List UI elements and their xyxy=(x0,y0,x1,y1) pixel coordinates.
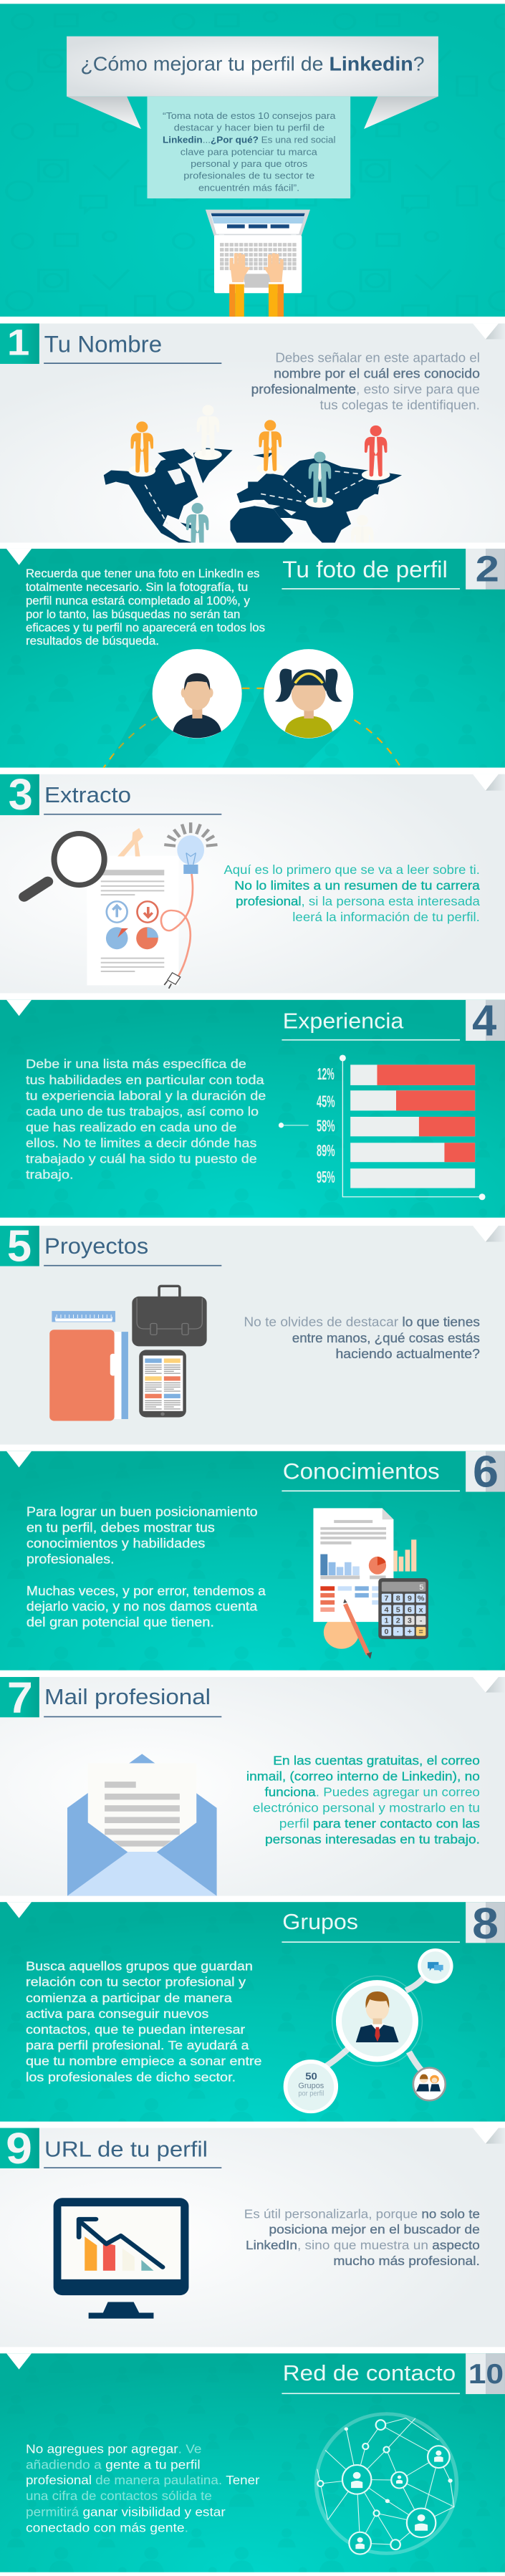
text block: profesional de manera paulatina. Tener xyxy=(26,2473,259,2487)
text block: posiciona mejor en el buscador de xyxy=(269,2222,480,2236)
text block: personas interesadas en tu trabajo. xyxy=(265,1832,480,1847)
number badge 3 xyxy=(0,770,39,819)
panel: 4 Experiencia xyxy=(0,996,505,1218)
panel: 2 Tu foto de perfil xyxy=(0,549,505,768)
icon: calculator: 2 xyxy=(396,1618,400,1625)
text block: profesionales. xyxy=(27,1552,115,1567)
avatar shadows xyxy=(106,681,342,768)
panel: 5 Proyectos xyxy=(0,1221,505,1445)
text block: funciona. Puedes agregar un correo xyxy=(265,1785,480,1799)
text block: No lo limites a un resumen de tu carrera xyxy=(234,879,480,893)
text block: trabajo. xyxy=(26,1168,74,1182)
text block: Recuerda que tener una foto en LinkedIn es xyxy=(26,567,260,580)
number badge 6 xyxy=(466,1446,505,1496)
number badge 5: 5 xyxy=(7,1221,32,1271)
icon: calculator: 1 xyxy=(385,1618,389,1625)
label: groups count: por perfil xyxy=(298,2090,324,2098)
text block: LinkedIn, sino que muestra un aspecto xyxy=(246,2238,480,2252)
icon: calculator: 5 xyxy=(396,1607,400,1614)
text block: No agregues por agregar. Ve xyxy=(26,2441,201,2456)
text block: comienza a participar de manera xyxy=(26,1991,232,2006)
icon: briefcase xyxy=(132,1286,207,1346)
text block: nombre por el cuál eres conocido xyxy=(274,367,480,381)
text block: en tu perfil, debes mostrar tus xyxy=(27,1521,215,1535)
icon: calculator: 7 xyxy=(385,1595,389,1603)
quote box: clave para potenciar tu marca xyxy=(181,147,317,158)
icon: calculator: 3 xyxy=(408,1618,412,1625)
text block: los profesionales de dicho sector. xyxy=(26,2070,236,2085)
icon: calculator: · xyxy=(397,1628,400,1636)
corner notch xyxy=(473,1226,505,1242)
number badge 1: 1 xyxy=(7,322,29,363)
icon: laptop with hands xyxy=(206,210,310,317)
avatar: woman xyxy=(264,649,353,739)
heading: Mail profesional xyxy=(44,1683,211,1709)
text block: tu experiencia laboral y la duración de xyxy=(26,1089,266,1103)
dashed connectors xyxy=(104,688,401,768)
text block: trabajado y cuál ha sido tu puesto de xyxy=(26,1152,257,1166)
bar chart: 95% xyxy=(317,1168,335,1186)
text block: por lo tanto, las búsquedas no serán tan xyxy=(26,607,240,621)
number badge 1 xyxy=(0,322,39,364)
text block xyxy=(26,567,265,648)
text block: Debes señalar en este apartado el xyxy=(275,351,480,365)
quote box: encuentrén más fácil”. xyxy=(198,183,299,193)
text block: haciendo actualmente? xyxy=(335,1347,480,1362)
heading: Red de contacto xyxy=(283,2361,456,2385)
icon: calculator: 6 xyxy=(408,1607,412,1614)
bar chart: 12% xyxy=(317,1065,335,1083)
icon: calculator: - xyxy=(420,1618,423,1625)
icon: calculator: % xyxy=(418,1595,424,1603)
text block xyxy=(223,863,480,925)
panel: 1 Tu Nombre xyxy=(0,322,505,566)
number badge 9: 9 xyxy=(6,2124,32,2173)
text block: del gran potencial que tienen. xyxy=(27,1615,214,1630)
text block xyxy=(251,351,480,413)
text block: profesionalmente, esto sirve para que xyxy=(251,383,480,397)
number badge 9 xyxy=(0,2124,39,2173)
corner notch xyxy=(473,1677,505,1693)
number badge 3: 3 xyxy=(9,770,33,819)
quote box: Linkedin...¿Por qué? Es una red social xyxy=(163,135,335,145)
number badge 8 xyxy=(466,1899,505,1948)
icon: calculator: 4 xyxy=(385,1607,389,1614)
icon: calculator: 0 xyxy=(385,1628,389,1636)
corner notch xyxy=(6,1000,32,1016)
text block: perfil nunca estará completado al 100%, y xyxy=(26,593,250,607)
bar chart: 45% xyxy=(317,1093,335,1111)
quote box xyxy=(147,97,350,198)
text block: En las cuentas gratuitas, el correo xyxy=(273,1754,480,1768)
text block: relación con tu sector profesional y xyxy=(26,1975,246,1989)
icon: envelope xyxy=(67,1754,217,1896)
quote box: personal y para que otros xyxy=(191,159,307,169)
text block: conectado con más gente. xyxy=(26,2520,188,2534)
panel: 7 Mail profesional xyxy=(0,1673,505,1896)
title ribbon xyxy=(67,37,438,97)
text block: conocimientos y habilidades xyxy=(27,1537,205,1551)
corner notch xyxy=(6,2353,32,2370)
text block: Busca aquellos grupos que guardan xyxy=(26,1959,253,1974)
network globe xyxy=(317,2414,457,2555)
heading: Extracto xyxy=(44,782,131,807)
label: groups count: 50 xyxy=(305,2072,317,2082)
heading: Tu Nombre xyxy=(44,332,162,357)
icon: calculator xyxy=(378,1578,428,1639)
icon: compass xyxy=(117,828,143,856)
ribbon tail right xyxy=(364,97,438,129)
text block: Debe ir una lista más específica de xyxy=(26,1057,246,1072)
number badge 6: 6 xyxy=(473,1446,499,1496)
icon: calculator: + xyxy=(408,1628,412,1636)
number badge 2 xyxy=(466,549,505,590)
icon: monitor with chart xyxy=(54,2198,188,2319)
text block: tus habilidades en particular con toda xyxy=(26,1073,264,1087)
icon: calculator: 8 xyxy=(396,1595,400,1603)
number badge 10: 10 xyxy=(468,2358,504,2390)
text block: permitirá ganar visibilidad y estar xyxy=(26,2504,226,2519)
text block: activa para conseguir nuevos xyxy=(26,2007,208,2022)
text block: inmail, (correo interno de Linkedin), no xyxy=(246,1769,480,1784)
icon: light bulb with cable xyxy=(161,822,217,989)
icon: calculator: = xyxy=(418,1628,423,1636)
text block: que has realizado en cada uno de xyxy=(26,1120,236,1135)
number badge 5 xyxy=(0,1221,39,1271)
text block: perfil para tener contacto con las xyxy=(279,1817,480,1831)
panel: header xyxy=(0,4,505,317)
panel: 9 URL de tu perfil xyxy=(0,2124,505,2347)
quote box: “Toma nota de estos 10 consejos para xyxy=(163,111,336,121)
text block: No te olvides de destacar lo que tienes xyxy=(244,1315,480,1330)
text block: Es útil personalizarla, porque no solo te xyxy=(244,2206,480,2221)
label: groups count xyxy=(298,2072,324,2098)
text block: tus colegas te identifiquen. xyxy=(319,398,480,413)
ribbon tail left xyxy=(67,97,141,129)
icon: two people xyxy=(416,2074,441,2092)
corner notch xyxy=(473,324,505,339)
bar chart: 89% xyxy=(317,1142,335,1160)
text block: leerá la información de tu perfil. xyxy=(292,910,480,925)
text block: que tu nombre empiece a sonar entre xyxy=(26,2054,262,2069)
world map xyxy=(104,448,402,543)
number badge 7: 7 xyxy=(7,1673,33,1723)
text block: para perfil profesional. Te ayudará a xyxy=(26,2039,249,2053)
number badge 8: 8 xyxy=(472,1899,499,1948)
avatar: man xyxy=(153,649,242,739)
text block: contactos, que te puedan interesar xyxy=(26,2023,245,2037)
text block: profesional, si la persona esta interesada xyxy=(236,895,480,909)
number badge 2: 2 xyxy=(476,549,499,590)
text block: mucho más profesional. xyxy=(333,2254,480,2268)
text block: dejarlo vacio, y no nos damos cuenta xyxy=(27,1600,258,1615)
heading: Proyectos xyxy=(44,1233,148,1259)
label: groups count: Grupos xyxy=(298,2081,324,2090)
text block xyxy=(26,1959,262,2085)
text block xyxy=(26,2441,259,2534)
number badge 4: 4 xyxy=(472,996,496,1045)
heading: Tu foto de perfil xyxy=(282,557,448,583)
icon: ruler xyxy=(52,1311,115,1322)
icon: magnifier xyxy=(24,834,105,897)
bar chart xyxy=(279,1054,486,1200)
panel: 8 Grupos xyxy=(0,1899,505,2128)
text block: ellos. No te limites a decir dónde has xyxy=(26,1136,256,1150)
icon: tablet xyxy=(139,1350,186,1417)
quote box: destacar y hacer bien tu perfil de xyxy=(174,123,324,133)
text block: cada uno de tus trabajos, así como lo xyxy=(26,1105,259,1119)
text block xyxy=(244,2206,480,2268)
text block: una cifra de contactos sólida te xyxy=(26,2489,212,2503)
icon: report with charts xyxy=(313,1508,416,1649)
corner notch xyxy=(473,774,505,791)
heading: Conocimientos xyxy=(283,1458,440,1484)
panel: 6 Conocimientos xyxy=(0,1446,505,1671)
heading: URL de tu perfil xyxy=(44,2137,208,2161)
number badge 10 xyxy=(466,2353,505,2394)
text block: totalmente necesario. Sin la fotografía, tu xyxy=(26,580,248,594)
heading: Experiencia xyxy=(283,1008,404,1033)
icon: document with charts xyxy=(87,856,179,985)
network diagram xyxy=(284,1948,453,2113)
text block: Aquí es lo primero que se va a leer sobre ti. xyxy=(223,863,480,878)
icon: businessman xyxy=(356,1991,399,2042)
text block: Muchas veces, y por error, tendemos a xyxy=(27,1584,266,1599)
text block xyxy=(26,1057,266,1182)
text block: eficaces y tu perfil no aparecerá en todos los xyxy=(26,620,265,635)
text block: electrónico personal y mostrarlo en tu xyxy=(253,1801,480,1815)
icon: calculator: 5 xyxy=(419,1584,424,1592)
corner notch xyxy=(6,1451,32,1468)
heading: Grupos xyxy=(282,1909,358,1934)
icon: folder xyxy=(49,1330,128,1421)
text block: resultados de búsqueda. xyxy=(26,634,159,648)
text block: Para lograr un buen posicionamiento xyxy=(27,1505,258,1519)
icon: pencil xyxy=(343,1599,372,1659)
corner notch xyxy=(473,2128,505,2143)
text block: añadiendo a gente a tu perfil xyxy=(26,2457,201,2471)
number badge 7 xyxy=(0,1673,39,1723)
icon: chat bubbles xyxy=(428,1962,443,1972)
text block xyxy=(246,1754,480,1847)
bar chart: 58% xyxy=(317,1117,335,1135)
title ribbon: ¿Cómo mejorar tu perfil de Linkedin? xyxy=(80,53,425,75)
icon: calculator: x xyxy=(419,1607,423,1614)
panel: 3 Extracto xyxy=(0,770,505,993)
icon: calculator: 9 xyxy=(408,1595,412,1603)
people markers on map xyxy=(128,405,390,566)
corner notch xyxy=(6,1902,32,1918)
text block: entre manos, ¿qué cosas estás xyxy=(292,1332,480,1346)
text block xyxy=(27,1505,266,1630)
quote box: profesionales de tu sector te xyxy=(183,171,314,181)
number badge 4 xyxy=(466,996,505,1045)
text block xyxy=(244,1315,480,1362)
panel: 10 Red de contacto xyxy=(0,2353,505,2572)
corner notch xyxy=(6,549,32,565)
